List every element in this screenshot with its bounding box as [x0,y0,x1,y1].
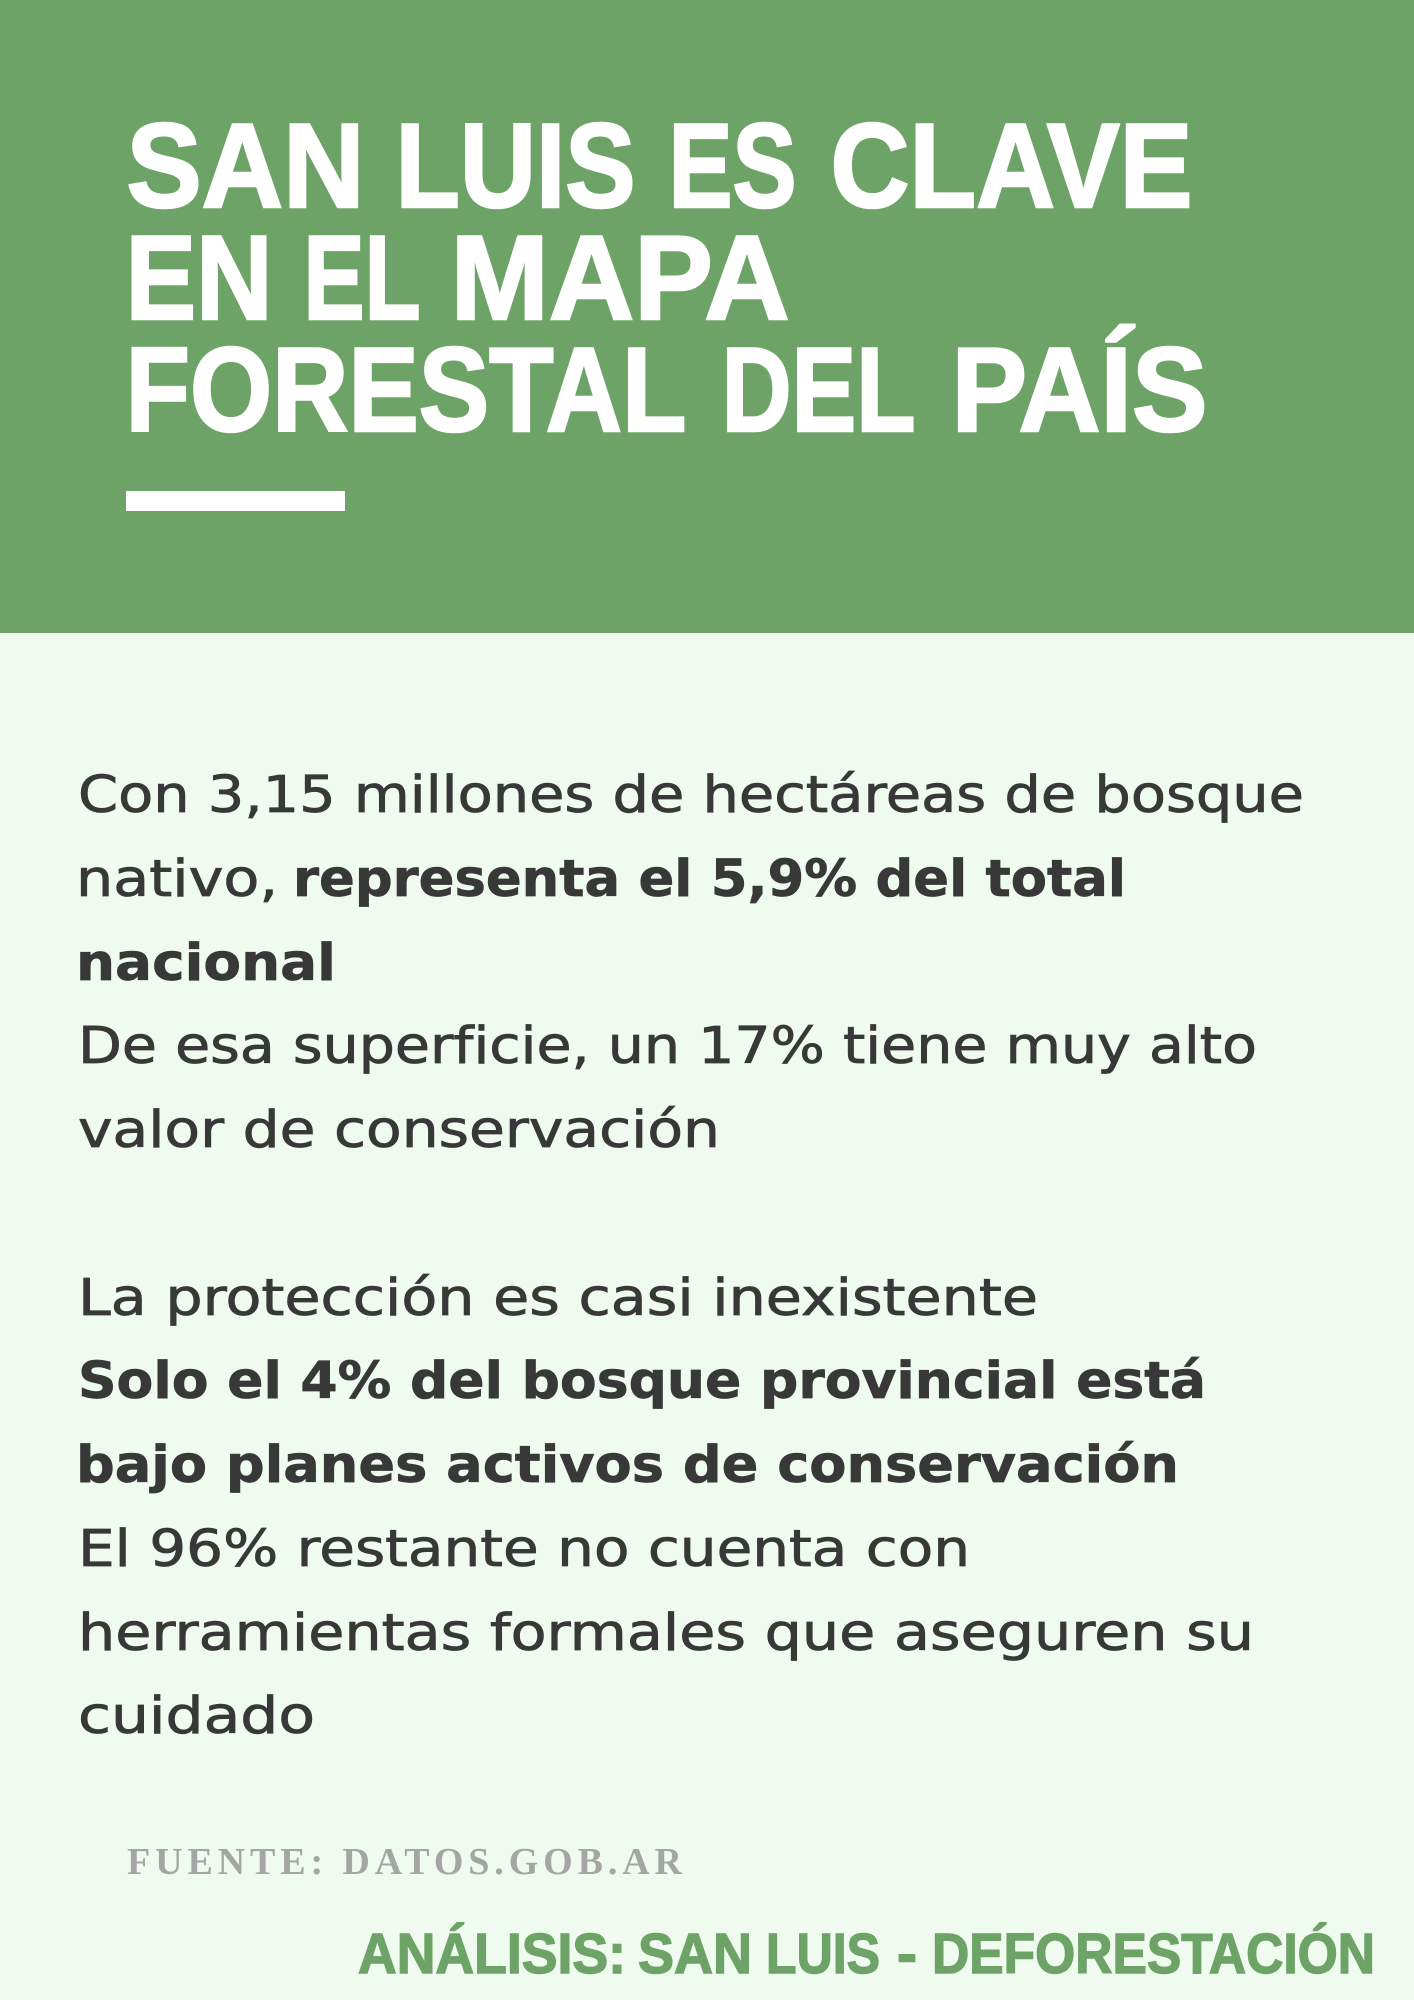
title underline bar [126,491,345,511]
title: LUIS [396,99,636,233]
text block: protection: herramientas formales que aseguren su [78,1604,1254,1663]
credit line: - [897,1922,917,1986]
credit line: SAN [638,1922,752,1986]
credit line [358,1922,1375,1986]
title: FORESTAL [126,323,686,457]
title: SAN [126,99,364,233]
text block: protection: bajo planes activos de conservación [76,1436,1179,1495]
text block: protection [76,1269,1254,1746]
text block: forest surface: Con 3,15 millones de hectáreas de bosque [78,766,1304,825]
credit line: LUIS [766,1922,880,1986]
text block: forest surface: nativo, [76,850,278,909]
text block: forest surface [76,766,1304,1160]
title: PAÍS [952,323,1208,457]
text block: protection: Solo el 4% del bosque provincial está [78,1352,1206,1411]
text block: forest surface: De esa superficie, un 17% tiene muy alto [78,1017,1257,1076]
title [126,99,1208,457]
title: CLAVE [830,99,1192,233]
title: EL [304,211,420,345]
title: MAPA [450,211,790,345]
title: DEL [722,323,916,457]
text block: forest surface: representa el 5,9% del total [293,850,1126,909]
panel: header [0,0,1414,633]
text block: forest surface: nacional [76,934,336,993]
text block: forest surface: valor de conservación [78,1101,720,1160]
credit line: DEFORESTACIÓN [932,1922,1375,1986]
title: EN [126,211,272,345]
credit line: ANÁLISIS: [358,1922,626,1986]
text block: protection: La protección es casi inexistente [78,1269,1038,1328]
text block: protection: cuidado [78,1687,315,1746]
text block: protection: El 96% restante no cuenta con [78,1520,970,1579]
title: ES [668,99,796,233]
source note: FUENTE: DATOS.GOB.AR [127,1841,683,1883]
